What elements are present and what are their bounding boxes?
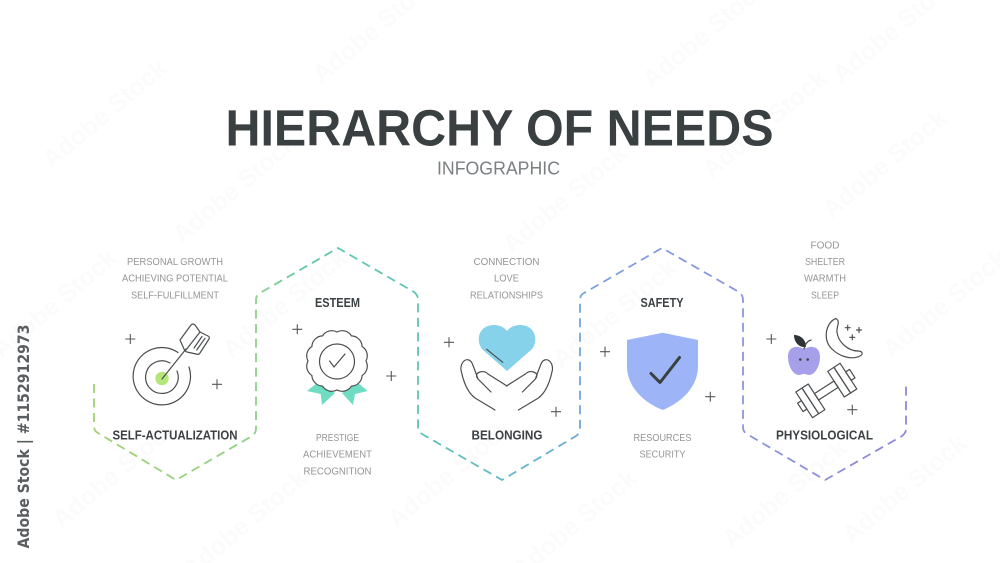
background watermark: Adobe Stock bbox=[497, 139, 632, 259]
icon: moon and stars bbox=[826, 318, 862, 358]
icon: sparkle bbox=[386, 371, 396, 381]
esteem details: RECOGNITION bbox=[304, 465, 372, 477]
icon: sparkle bbox=[444, 337, 454, 347]
physiological details bbox=[804, 239, 846, 301]
physiological details: WARMTH bbox=[804, 273, 846, 285]
background watermark: Adobe Stock bbox=[217, 244, 352, 364]
icon: sparkle bbox=[847, 405, 857, 415]
esteem details: ACHIEVEMENT bbox=[303, 449, 373, 461]
heading: esteem: ESTEEM bbox=[315, 296, 360, 310]
self-actualization details: ACHIEVING POTENTIAL bbox=[122, 273, 228, 285]
physiological details: SLEEP bbox=[811, 289, 839, 301]
self-actualization details: PERSONAL GROWTH bbox=[127, 256, 223, 268]
belonging details bbox=[470, 256, 543, 301]
subtitle: INFOGRAPHIC bbox=[437, 158, 560, 178]
heading: belonging: BELONGING bbox=[472, 428, 542, 442]
physiological details: FOOD bbox=[810, 239, 840, 251]
title: HIERARCHY OF NEEDS bbox=[226, 100, 774, 156]
safety details: SECURITY bbox=[640, 449, 686, 461]
icon: shield with check bbox=[627, 333, 698, 410]
icon: target and arrow bbox=[133, 324, 209, 405]
panel: belonging bbox=[444, 256, 561, 442]
belonging details: LOVE bbox=[494, 273, 519, 285]
background watermark: Adobe Stock bbox=[717, 434, 852, 554]
icon: sparkle bbox=[551, 407, 561, 417]
dashed hexagon connector bbox=[94, 248, 906, 480]
background watermark: Adobe Stock bbox=[837, 429, 972, 549]
heading: physiological: PHYSIOLOGICAL bbox=[776, 428, 873, 442]
safety details: RESOURCES bbox=[634, 432, 692, 444]
icon: apple bbox=[788, 335, 820, 375]
belonging details: CONNECTION bbox=[474, 256, 540, 268]
belonging details: RELATIONSHIPS bbox=[470, 289, 543, 301]
self-actualization details bbox=[122, 256, 228, 301]
esteem details bbox=[303, 432, 373, 477]
panel: safety bbox=[600, 296, 715, 461]
icon: heart in hands bbox=[461, 325, 552, 410]
self-actualization details: SELF-FULFILLMENT bbox=[131, 289, 220, 301]
heading: safety: SAFETY bbox=[640, 296, 684, 310]
background watermark: Adobe Stock bbox=[547, 254, 682, 374]
background watermark: Adobe Stock bbox=[817, 104, 952, 224]
icon: sparkle bbox=[705, 392, 715, 402]
physiological details: SHELTER bbox=[805, 256, 845, 268]
panel: physiological bbox=[766, 239, 873, 442]
panel: esteem bbox=[292, 296, 396, 477]
icon: award badge bbox=[307, 331, 368, 405]
icon: sparkle bbox=[600, 347, 610, 357]
icon: sparkle bbox=[212, 379, 222, 389]
heading: self-actualization: SELF-ACTUALIZATION bbox=[112, 428, 238, 442]
background watermark: Adobe Stock bbox=[47, 414, 182, 534]
background watermark: Adobe Stock bbox=[382, 414, 517, 534]
safety details bbox=[634, 432, 692, 461]
panel: self-actualization bbox=[112, 256, 238, 442]
icon: sparkle bbox=[766, 334, 776, 344]
stock credit: Adobe Stock | #1152912973 bbox=[14, 324, 34, 548]
icon: sparkle bbox=[125, 334, 135, 344]
esteem details: PRESTIGE bbox=[316, 432, 359, 444]
icon: sparkle bbox=[292, 324, 302, 334]
background watermark: Adobe Stock bbox=[37, 54, 172, 174]
background watermark: Adobe Stock bbox=[167, 129, 302, 249]
background watermark: Adobe Stock bbox=[697, 64, 832, 184]
icon: dumbbell bbox=[792, 361, 861, 420]
